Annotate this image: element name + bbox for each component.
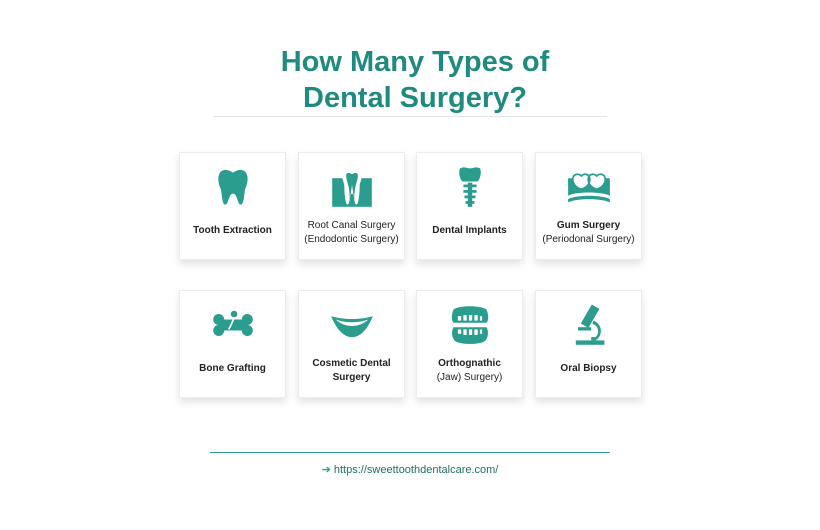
card: bone grafting [179, 290, 286, 398]
card: tooth extraction [179, 152, 286, 260]
card: orthognathic: (Jaw) Surgery) [437, 372, 502, 383]
card: root canal: (Endodontic Surgery) [304, 234, 399, 245]
card: cosmetic: Cosmetic Dental [312, 358, 391, 369]
title [281, 46, 550, 114]
card: tooth extraction: Tooth Extraction [193, 225, 272, 236]
card: cosmetic [298, 290, 405, 398]
card: gum surgery: (Periodonal Surgery) [542, 234, 635, 245]
card: cosmetic: Surgery [333, 372, 370, 383]
card: gum surgery [535, 152, 642, 260]
card: dental implants: Dental Implants [432, 225, 507, 236]
card: root canal: Root Canal Surgery [308, 220, 395, 231]
card: gum surgery: Gum Surgery [557, 220, 620, 231]
card: root canal [298, 152, 405, 260]
title: Dental Surgery? [303, 82, 527, 114]
card: oral biopsy: Oral Biopsy [560, 363, 617, 374]
card: oral biopsy [535, 290, 642, 398]
url footer: ➔ https://sweettoothdentalcare.com/ [322, 464, 498, 476]
card: orthognathic: Orthognathic [438, 358, 501, 369]
card: bone grafting: Bone Grafting [199, 363, 266, 374]
card: orthognathic [416, 290, 523, 398]
title: How Many Types of [281, 46, 549, 78]
card: dental implants [416, 152, 523, 260]
